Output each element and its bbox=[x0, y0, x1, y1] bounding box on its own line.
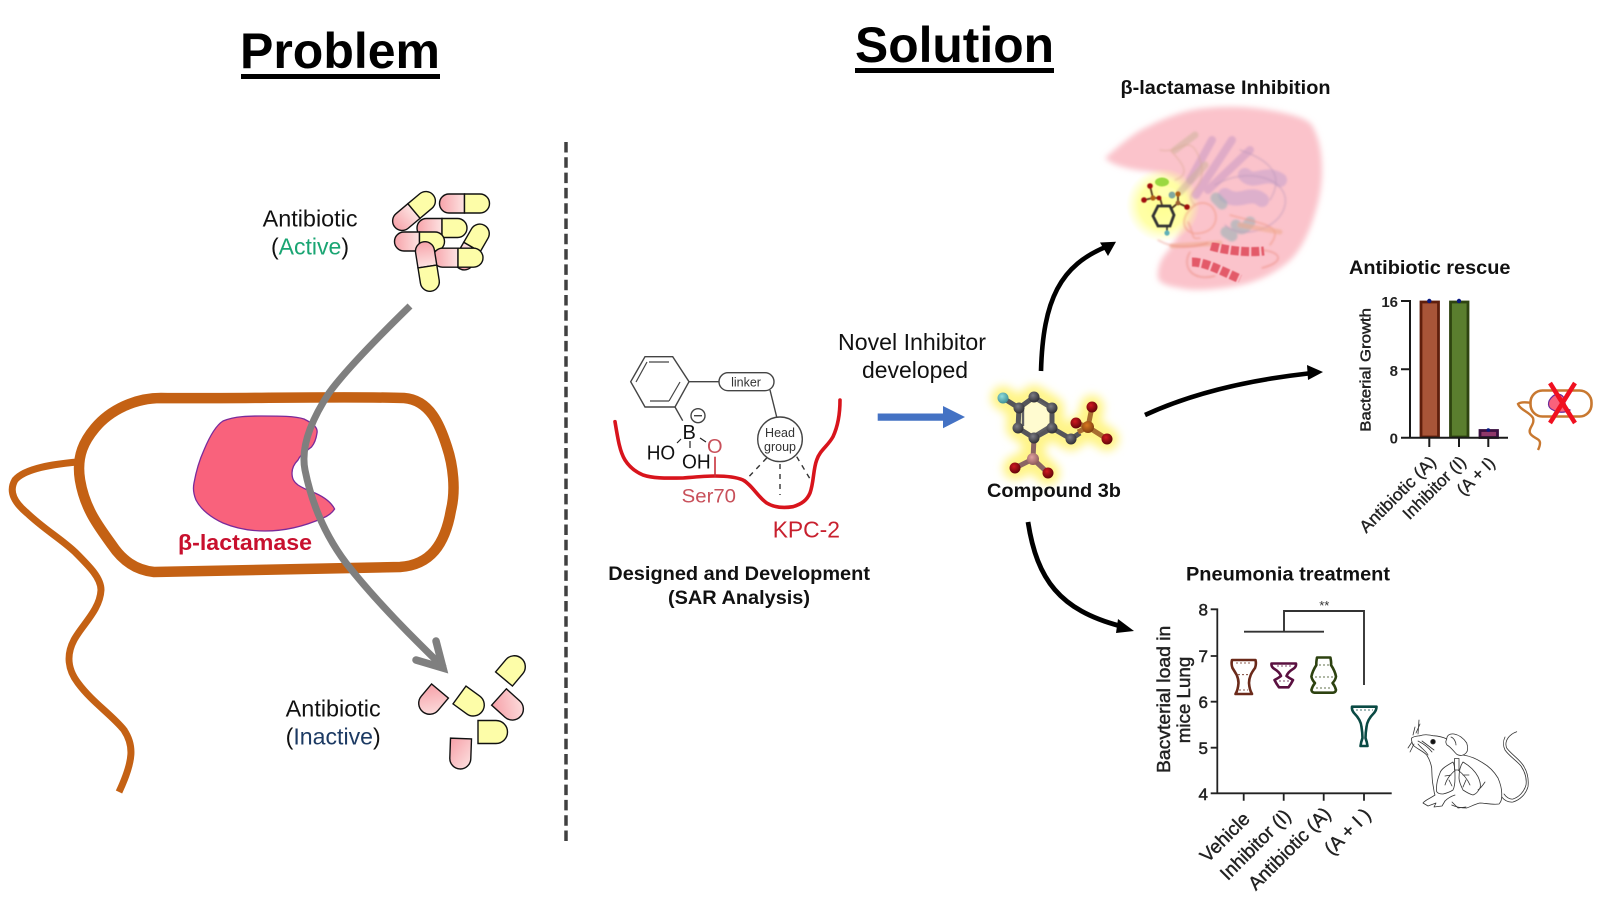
panel divider bbox=[564, 142, 568, 845]
enzyme: beta-lactamase bbox=[193, 416, 335, 531]
ligand glow bbox=[1126, 168, 1200, 242]
y tick labels bbox=[1381, 294, 1398, 448]
icon: active antibiotic capsules bbox=[389, 188, 493, 293]
boronate atom labels: OH bbox=[682, 451, 711, 473]
panel: pneumonia treatment bbox=[1154, 565, 1528, 895]
y tick labels: 8 bbox=[1390, 363, 1398, 380]
x tick labels: Inhibitor (I) bbox=[1399, 452, 1470, 523]
x tick labels: Inhibitor (I) bbox=[1216, 806, 1296, 885]
heading: Problem: Problem bbox=[240, 23, 440, 79]
label: antibiotic inactive: Antibiotic bbox=[286, 696, 381, 722]
ligand contact bbox=[1155, 178, 1176, 198]
label: compound 3b: Compound 3b bbox=[987, 480, 1121, 502]
caption: design and development: (SAR Analysis) bbox=[668, 587, 810, 609]
x tick labels: Vehicle bbox=[1196, 809, 1255, 867]
panel: antibiotic rescue bbox=[1349, 258, 1592, 537]
x tick labels bbox=[1196, 804, 1376, 895]
caption: design and development bbox=[608, 563, 871, 609]
y axis title bbox=[1154, 626, 1194, 773]
serine bond bbox=[714, 457, 716, 477]
data points bbox=[1427, 299, 1490, 432]
x tick labels bbox=[1356, 452, 1499, 537]
KPC-2 pocket curve bbox=[615, 400, 840, 507]
violin: inhibitor bbox=[1271, 664, 1296, 687]
y tick labels: 4 bbox=[1199, 785, 1208, 804]
boronate atom labels: O bbox=[707, 436, 723, 458]
y tick labels bbox=[1199, 600, 1208, 804]
y axis title: Bacterial Growth bbox=[1358, 308, 1374, 432]
panel: design and development bbox=[608, 357, 871, 609]
heading: antibiotic rescue: Antibiotic rescue bbox=[1349, 258, 1510, 279]
label: beta-lactamase: β-lactamase bbox=[178, 530, 312, 555]
y tick labels: 6 bbox=[1199, 693, 1208, 712]
protein helices bbox=[1192, 246, 1264, 279]
label: linker: linker bbox=[731, 376, 761, 390]
y tick labels: 7 bbox=[1199, 647, 1208, 666]
label: head group: Head bbox=[765, 426, 795, 440]
label: head group: group bbox=[764, 440, 796, 454]
y tick labels: 8 bbox=[1199, 600, 1208, 620]
compound 3b molecule bbox=[998, 392, 1112, 478]
label: novel inhibitor developed: developed bbox=[862, 357, 968, 383]
heading: pneumonia treatment: Pneumonia treatment bbox=[1186, 565, 1391, 586]
illustration: mouse with lungs bbox=[1408, 720, 1528, 808]
label: antibiotic inactive bbox=[286, 696, 381, 750]
caption: design and development: Designed and Development bbox=[608, 563, 871, 585]
arrow: blue to compound bbox=[878, 406, 965, 428]
bar chart: bacterial growth bbox=[1356, 294, 1508, 537]
arrow: antibiotic through the cell bbox=[304, 306, 444, 668]
label: Ser70: Ser70 bbox=[682, 487, 736, 508]
violin chart: bacterial load bbox=[1154, 598, 1392, 895]
label: antibiotic active bbox=[263, 206, 358, 260]
arrow: to antibiotic rescue bbox=[1145, 365, 1323, 415]
panel: beta-lactamase inhibition bbox=[1105, 78, 1330, 290]
y tick labels: 5 bbox=[1199, 739, 1208, 758]
violin: antibiotic bbox=[1311, 658, 1336, 693]
label: antibiotic active: Antibiotic bbox=[263, 206, 358, 232]
protein surface bbox=[1105, 107, 1322, 290]
y tick labels: 0 bbox=[1390, 430, 1398, 448]
x tick labels: Antibiotic (A) bbox=[1245, 804, 1336, 895]
axes bbox=[1401, 301, 1508, 447]
boronate atom labels: HO bbox=[647, 442, 675, 464]
icon: broken antibiotic fragments bbox=[414, 651, 530, 769]
significance bracket bbox=[1244, 598, 1364, 685]
heading: Solution: Solution bbox=[855, 17, 1054, 73]
label: head group bbox=[764, 426, 796, 454]
bacterium cell bbox=[12, 397, 454, 792]
label: KPC-2: KPC-2 bbox=[773, 516, 840, 542]
violin: combination bbox=[1352, 707, 1376, 746]
y axis title: Bacvterial load in bbox=[1154, 626, 1174, 773]
x tick labels: Antibiotic (A) bbox=[1356, 452, 1440, 537]
label: novel inhibitor developed bbox=[838, 329, 986, 383]
boronate atom labels: B bbox=[682, 422, 696, 444]
x tick labels: (A + I) bbox=[1453, 453, 1499, 499]
axes bbox=[1211, 609, 1392, 801]
arrow: to pneumonia treatment bbox=[1028, 522, 1134, 633]
y tick labels: 16 bbox=[1381, 294, 1398, 311]
y axis title: mice Lung bbox=[1174, 657, 1194, 743]
x tick labels: (A + I ) bbox=[1321, 805, 1376, 859]
protein ribbon bbox=[1158, 135, 1285, 277]
heading: inhibition: β-lactamase Inhibition bbox=[1120, 78, 1330, 99]
icon: inhibited bacterium bbox=[1518, 383, 1592, 450]
arrow: to enzyme inhibition bbox=[1041, 242, 1116, 371]
boronate atom labels bbox=[647, 422, 723, 473]
violin: vehicle bbox=[1232, 660, 1256, 694]
significance bracket: ** bbox=[1319, 598, 1329, 613]
bars bbox=[1421, 302, 1498, 438]
dashed interactions bbox=[746, 457, 812, 495]
label: novel inhibitor developed: Novel Inhibitor bbox=[838, 329, 986, 355]
ligand in active site bbox=[1141, 183, 1190, 236]
label: antibiotic inactive: (Inactive) bbox=[286, 724, 381, 750]
panel: problem bbox=[12, 188, 530, 792]
label: antibiotic active: (Active) bbox=[271, 234, 349, 260]
chemical scaffold: phenylboronate with linker and head group bbox=[631, 357, 802, 462]
